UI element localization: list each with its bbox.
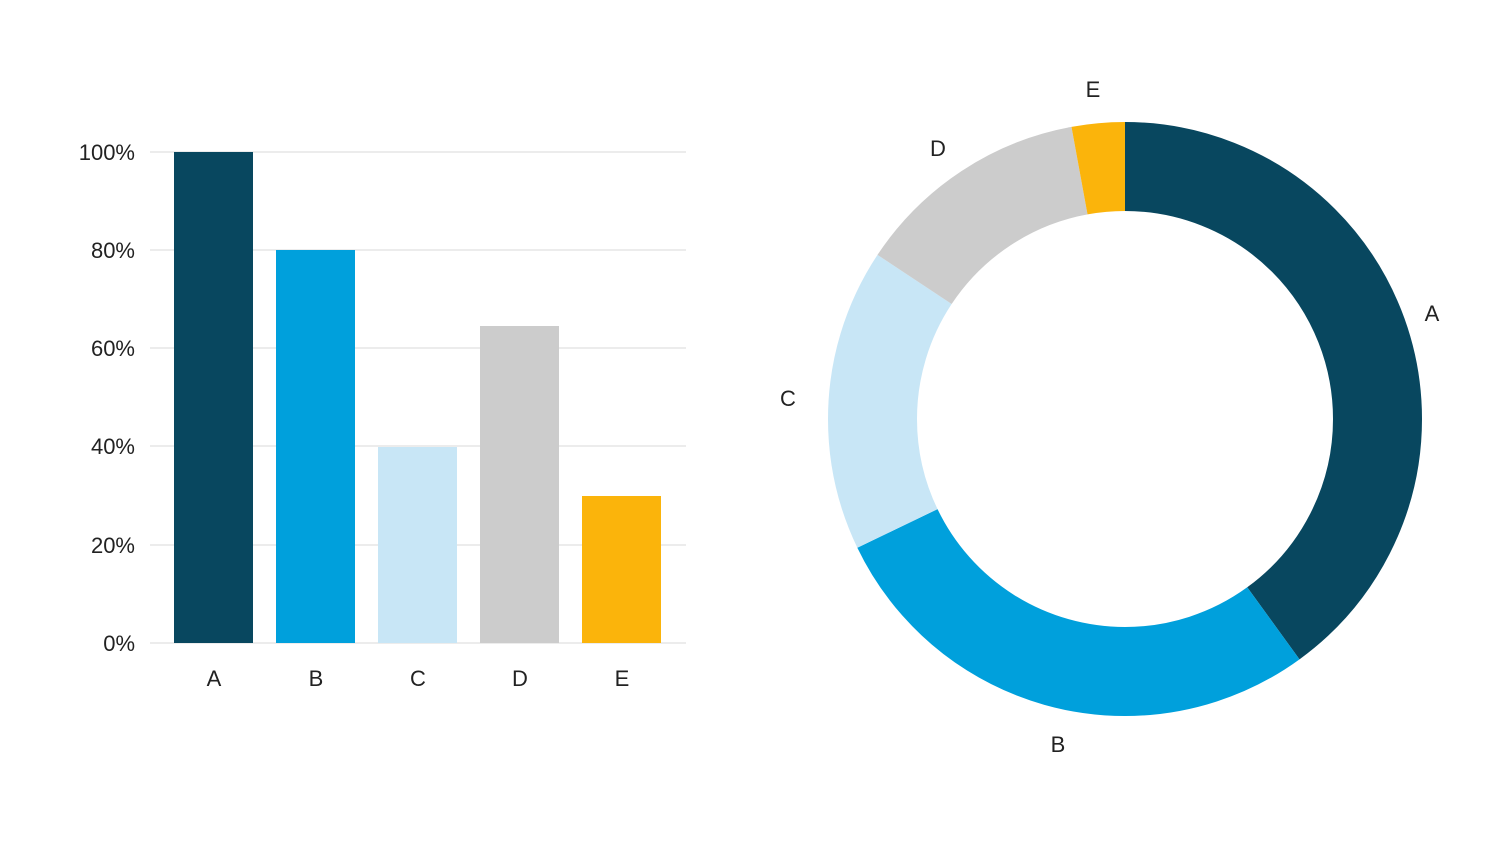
donut labels: D [930,136,946,161]
donut chart [780,77,1440,757]
donut labels [780,77,1440,757]
x axis labels: E [615,666,629,691]
y axis labels: 60% [91,336,135,361]
donut labels: C [780,386,796,411]
y axis labels: 80% [91,238,135,263]
y axis labels [79,140,135,656]
donut labels: A [1425,301,1440,326]
x axis labels: D [512,666,528,691]
bar chart [79,140,686,691]
y axis labels: 40% [91,434,135,459]
bars [174,152,661,643]
x axis labels [207,666,629,691]
y axis labels: 0% [103,631,135,656]
x axis labels: C [410,666,426,691]
donut labels: B [1051,732,1065,757]
y axis labels: 20% [91,533,135,558]
x axis labels: A [207,666,222,691]
donut labels: E [1086,77,1100,102]
x axis labels: B [309,666,323,691]
y axis labels: 100% [79,140,135,165]
